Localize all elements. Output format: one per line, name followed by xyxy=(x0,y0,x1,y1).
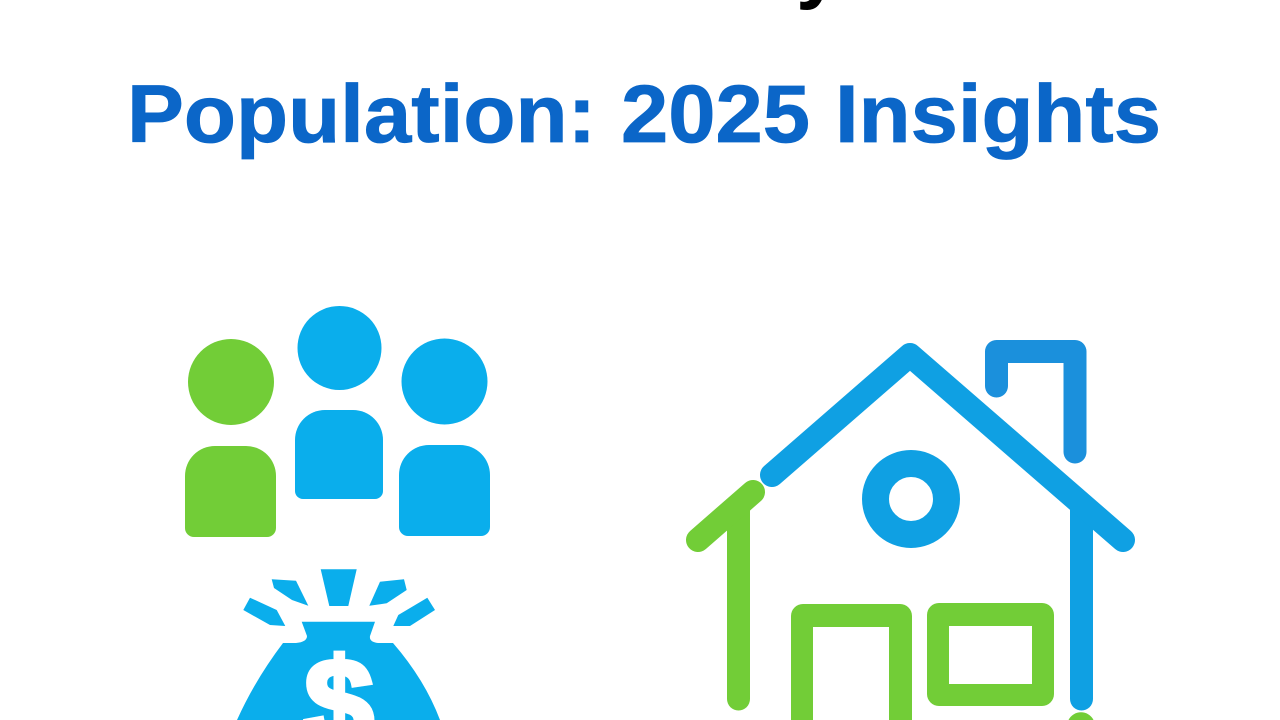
icon: money bag xyxy=(237,569,440,720)
title: Insights xyxy=(835,69,1161,160)
green dot xyxy=(1068,712,1094,720)
person: green xyxy=(185,339,276,537)
title xyxy=(127,69,1161,160)
icon: people group xyxy=(185,306,490,537)
round attic window xyxy=(876,464,946,534)
money bag rays xyxy=(243,569,435,626)
money bag body xyxy=(237,622,440,720)
house right wall xyxy=(1070,510,1093,699)
person: blue centre xyxy=(295,306,383,499)
title: 2025 xyxy=(621,69,810,160)
door xyxy=(791,604,912,720)
icon: house xyxy=(698,352,1123,720)
house left wall xyxy=(727,510,750,699)
clipped heading descenders xyxy=(248,0,842,11)
house roof xyxy=(772,355,1123,540)
person: blue right xyxy=(399,338,490,536)
house chimney xyxy=(996,352,1075,452)
title: Population: xyxy=(127,69,596,160)
window xyxy=(927,603,1054,706)
house left eave xyxy=(698,492,753,540)
